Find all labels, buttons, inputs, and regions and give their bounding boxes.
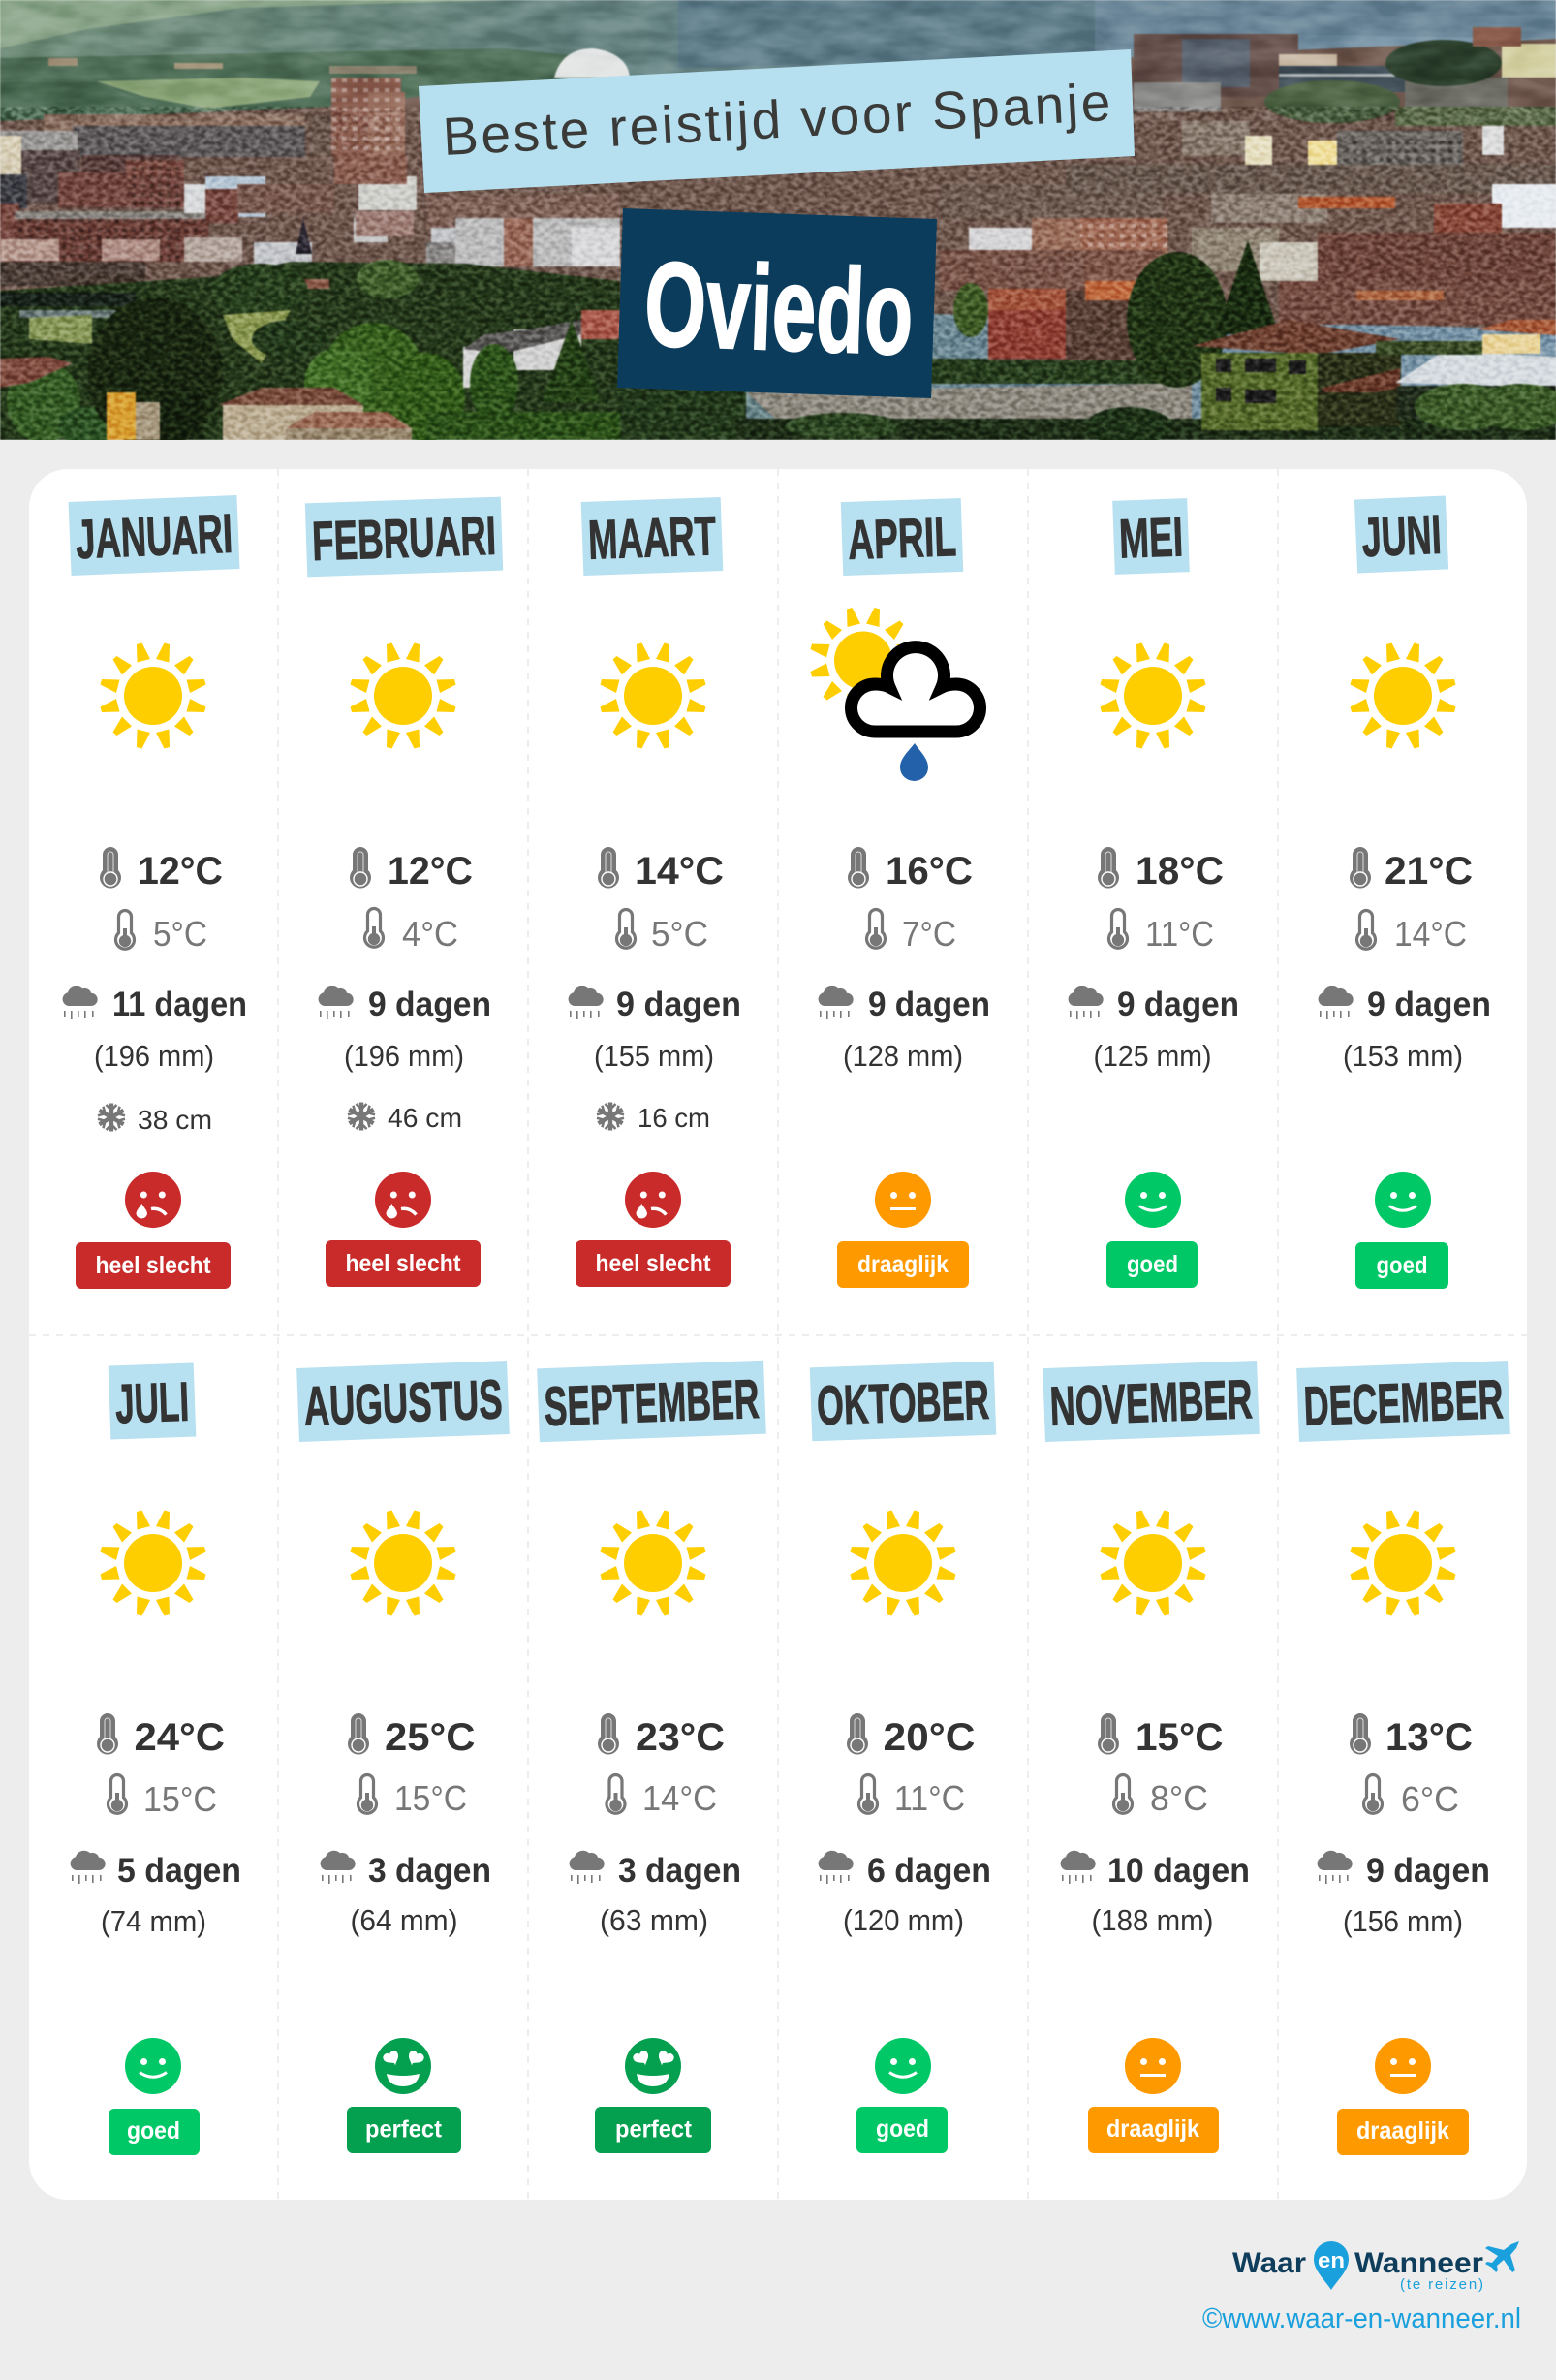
icon: neutral face xyxy=(1375,2038,1431,2094)
icon: rain cloud xyxy=(1061,1851,1096,1884)
rain days: 9 dagen xyxy=(616,986,741,1023)
max temperature: 25°C xyxy=(385,1716,475,1759)
icon: happy face xyxy=(875,2038,931,2094)
min temperature: 15°C xyxy=(394,1778,467,1818)
heading: Oviedo: Oviedo xyxy=(642,237,916,381)
month label: april xyxy=(841,498,963,576)
icon: snowflake xyxy=(347,1103,376,1130)
icon: thermometer low xyxy=(866,909,886,948)
icon: thermometer high xyxy=(1350,1713,1371,1755)
rain days: 11 dagen xyxy=(112,986,247,1023)
icon: thermometer high xyxy=(598,847,619,889)
rating badge: draaglijk xyxy=(1106,2115,1199,2143)
month label: november xyxy=(1043,1361,1260,1442)
month label: augustus xyxy=(296,1361,510,1442)
max temperature: 12°C xyxy=(388,850,473,892)
panel: juli xyxy=(71,1362,241,2155)
icon: sun xyxy=(101,643,205,748)
left quarter buildings xyxy=(44,114,305,134)
icon: thermometer low xyxy=(358,1775,376,1813)
rating badge xyxy=(576,1240,731,1287)
rating badge xyxy=(1106,1241,1198,1288)
background photo: Oviedo cityscape xyxy=(0,0,1556,449)
icon: rain cloud xyxy=(321,1851,356,1884)
icon: thermometer low xyxy=(1364,1775,1382,1813)
rating badge: goed xyxy=(127,2117,180,2145)
middle buildings xyxy=(426,194,620,228)
icon: thermometer low xyxy=(616,909,636,948)
panel: november xyxy=(1043,1361,1260,2153)
icon: thermometer low xyxy=(109,1775,126,1813)
icon: sun behind cloud with rain drop xyxy=(810,608,980,781)
month label: maart xyxy=(581,497,723,576)
rating badge: goed xyxy=(1376,1252,1428,1279)
month label: augustus: AUGUSTUS xyxy=(302,1368,504,1438)
icon: crying face xyxy=(625,1172,681,1228)
logo: Waar en Wanneer: (te reizen) xyxy=(1400,2276,1483,2293)
rain days: 9 dagen xyxy=(1366,1852,1490,1890)
max temperature: 12°C xyxy=(138,850,223,892)
icon: sun xyxy=(601,643,705,748)
icon: thermometer high xyxy=(350,847,371,889)
rainfall: (128 mm) xyxy=(843,1039,963,1073)
icon: sun xyxy=(1101,643,1205,748)
month label: oktober: OKTOBER xyxy=(816,1369,990,1437)
rain days: 3 dagen xyxy=(618,1852,741,1890)
rating badge xyxy=(837,1241,969,1288)
max temperature: 15°C xyxy=(1136,1716,1223,1759)
rainfall: (125 mm) xyxy=(1093,1039,1211,1073)
icon: sun xyxy=(1351,1510,1455,1616)
icon: rain cloud xyxy=(570,1851,605,1884)
rainfall: (196 mm) xyxy=(94,1039,214,1073)
panel: juni xyxy=(1319,495,1491,1289)
icon: crying face xyxy=(125,1172,181,1228)
rainfall: (196 mm) xyxy=(344,1039,464,1073)
max temperature: 23°C xyxy=(636,1716,725,1759)
icon: thermometer high xyxy=(100,847,121,889)
min temperature: 7°C xyxy=(902,914,956,954)
rainfall: (64 mm) xyxy=(351,1903,457,1937)
heading: Oviedo xyxy=(617,208,937,398)
snowfall: 38 cm xyxy=(138,1105,212,1135)
icon: heart-eyes face xyxy=(375,2038,431,2094)
icon: thermometer high xyxy=(847,1713,868,1755)
rating badge xyxy=(76,1242,231,1289)
icon: sun xyxy=(101,1510,205,1616)
icon: rain cloud xyxy=(319,986,354,1019)
min temperature: 11°C xyxy=(1145,914,1214,954)
icon: thermometer high xyxy=(1098,1713,1119,1755)
min temperature: 15°C xyxy=(143,1779,217,1819)
panel: mei xyxy=(1069,498,1239,1288)
rain days: 9 dagen xyxy=(1117,986,1239,1023)
icon: thermometer low xyxy=(116,911,134,949)
logo: Waar en Wanneer: en xyxy=(1318,2248,1345,2272)
right buildings xyxy=(1134,34,1298,97)
month label: juni: JUNI xyxy=(1360,504,1443,569)
logo: Waar en Wanneer xyxy=(1232,2241,1519,2293)
rain days: 9 dagen xyxy=(1367,986,1491,1023)
icon: thermometer high xyxy=(348,1713,369,1755)
rainfall: (156 mm) xyxy=(1343,1904,1463,1938)
icon: sun xyxy=(351,643,455,748)
icon: airplane xyxy=(1485,2241,1519,2272)
icon: sun xyxy=(851,1510,955,1616)
month label: januari: JANUARI xyxy=(75,503,233,571)
icon: rain cloud xyxy=(1069,986,1104,1019)
icon: sun xyxy=(601,1510,705,1616)
rating badge xyxy=(347,2107,461,2153)
month label: mei xyxy=(1112,498,1190,575)
rainfall: (63 mm) xyxy=(600,1903,708,1937)
min temperature: 14°C xyxy=(642,1778,717,1818)
panel: maart xyxy=(569,497,741,1287)
icon: thermometer low xyxy=(607,1775,625,1813)
panel: september xyxy=(537,1361,766,2153)
min temperature: 6°C xyxy=(1401,1779,1459,1819)
rainfall: (74 mm) xyxy=(101,1904,206,1938)
icon: thermometer low xyxy=(1356,911,1376,949)
icon: rain cloud xyxy=(1319,986,1354,1019)
rainfall: (120 mm) xyxy=(843,1903,964,1937)
icon: thermometer high xyxy=(598,1713,619,1755)
icon: neutral face xyxy=(1125,2038,1181,2094)
rating badge: goed xyxy=(1127,1251,1178,1278)
panel: oktober xyxy=(810,1362,996,2153)
rating badge xyxy=(1337,2109,1469,2155)
month label: april: APRIL xyxy=(847,506,957,572)
rain days: 6 dagen xyxy=(867,1852,991,1890)
max temperature: 14°C xyxy=(635,850,724,892)
rating badge: heel slecht xyxy=(345,1250,461,1277)
icon: thermometer low xyxy=(1114,1775,1132,1813)
max temperature: 24°C xyxy=(134,1716,225,1759)
icon: rain cloud xyxy=(569,986,604,1019)
month label: september xyxy=(537,1361,766,1442)
month label: juli: JULI xyxy=(114,1371,190,1435)
rating badge: draaglijk xyxy=(1356,2117,1449,2145)
snowfall: 46 cm xyxy=(388,1103,462,1133)
rainfall: (188 mm) xyxy=(1091,1903,1213,1937)
panel: climate card xyxy=(29,469,1527,2200)
icon: crying face xyxy=(375,1172,431,1228)
texture overlays xyxy=(0,107,1556,440)
month label: februari: FEBRUARI xyxy=(311,505,497,573)
icon: happy face xyxy=(1125,1172,1181,1228)
icon: rain cloud xyxy=(819,1851,854,1884)
panel: februari xyxy=(305,497,503,1287)
icon: rain cloud xyxy=(63,986,98,1019)
month label: oktober xyxy=(810,1362,996,1441)
icon: thermometer low xyxy=(1108,909,1128,948)
rain days: 9 dagen xyxy=(368,986,491,1023)
min temperature: 11°C xyxy=(894,1778,965,1818)
rating badge: heel slecht xyxy=(95,1252,211,1279)
logo: Waar en Wanneer: Wanneer xyxy=(1354,2247,1483,2279)
month label: januari xyxy=(69,495,239,576)
icon: rain cloud xyxy=(71,1851,106,1884)
month label: februari xyxy=(305,497,503,577)
logo: Waar en Wanneer: Waar xyxy=(1232,2247,1306,2279)
icon: happy face xyxy=(125,2038,181,2094)
month label: mei: MEI xyxy=(1118,506,1184,571)
rainfall: (153 mm) xyxy=(1343,1039,1463,1073)
icon: snowflake xyxy=(97,1103,126,1132)
min temperature: 14°C xyxy=(1394,914,1467,954)
min temperature: 4°C xyxy=(402,914,458,954)
max temperature: 20°C xyxy=(884,1716,975,1759)
title: Beste reistijd voor Spanje xyxy=(419,49,1135,193)
icon: thermometer high xyxy=(97,1713,118,1755)
panel: augustus xyxy=(296,1361,510,2153)
icon: thermometer low xyxy=(364,909,384,947)
panel: januari xyxy=(63,495,247,1289)
month label: juli xyxy=(109,1362,196,1440)
min temperature: 8°C xyxy=(1150,1778,1208,1818)
month label: november: NOVEMBER xyxy=(1048,1368,1254,1438)
lower middle xyxy=(620,383,746,440)
rating badge: perfect xyxy=(365,2116,443,2144)
max temperature: 16°C xyxy=(886,850,973,892)
icon: thermometer high xyxy=(1350,847,1371,889)
title: Beste reistijd voor Spanje: Beste reistijd voor Spanje xyxy=(441,72,1112,167)
icon: thermometer high xyxy=(848,847,869,889)
icon: map pin xyxy=(1314,2241,1349,2290)
icon: sun xyxy=(351,1510,455,1616)
max temperature: 18°C xyxy=(1136,850,1224,892)
rating badge xyxy=(326,1240,481,1287)
rating badge xyxy=(109,2109,200,2155)
panel: december xyxy=(1296,1361,1510,2155)
min temperature: 5°C xyxy=(153,914,207,954)
rating badge xyxy=(1088,2107,1219,2153)
month label: maart: MAART xyxy=(587,505,717,572)
rain days: 3 dagen xyxy=(368,1852,491,1890)
month label: juni xyxy=(1354,495,1448,574)
trees base, left and middle xyxy=(0,262,620,440)
icon: sun xyxy=(1351,643,1455,748)
rating badge xyxy=(595,2107,711,2153)
icon: rain cloud xyxy=(1318,1851,1353,1884)
icon: happy face xyxy=(1375,1172,1431,1228)
min temperature: 5°C xyxy=(651,914,708,954)
rating badge xyxy=(1355,1242,1448,1289)
rating badge: heel slecht xyxy=(595,1250,711,1277)
rating badge: goed xyxy=(876,2115,929,2143)
rating badge xyxy=(856,2107,948,2153)
rating badge: perfect xyxy=(615,2116,693,2144)
rain days: 5 dagen xyxy=(117,1852,241,1890)
max temperature: 13°C xyxy=(1385,1716,1473,1759)
icon: neutral face xyxy=(875,1172,931,1228)
right lower xyxy=(1127,252,1228,388)
rain days: 10 dagen xyxy=(1107,1852,1250,1890)
max temperature: 21°C xyxy=(1385,850,1473,892)
rating badge: draaglijk xyxy=(857,1251,949,1278)
icon: thermometer high xyxy=(1098,847,1119,889)
icon: heart-eyes face xyxy=(625,2038,681,2094)
month label: september: SEPTEMBER xyxy=(543,1368,761,1438)
rainfall: (155 mm) xyxy=(594,1039,714,1073)
panel: april xyxy=(810,498,990,1288)
icon: snowflake xyxy=(596,1103,625,1130)
icon: rain cloud xyxy=(819,986,854,1019)
copyright url: ©www.waar-en-wanneer.nl xyxy=(1202,2303,1521,2334)
icon: thermometer low xyxy=(858,1775,878,1813)
icon: sun xyxy=(1101,1510,1205,1616)
snowfall: 16 cm xyxy=(638,1103,710,1133)
rain days: 9 dagen xyxy=(868,986,990,1023)
